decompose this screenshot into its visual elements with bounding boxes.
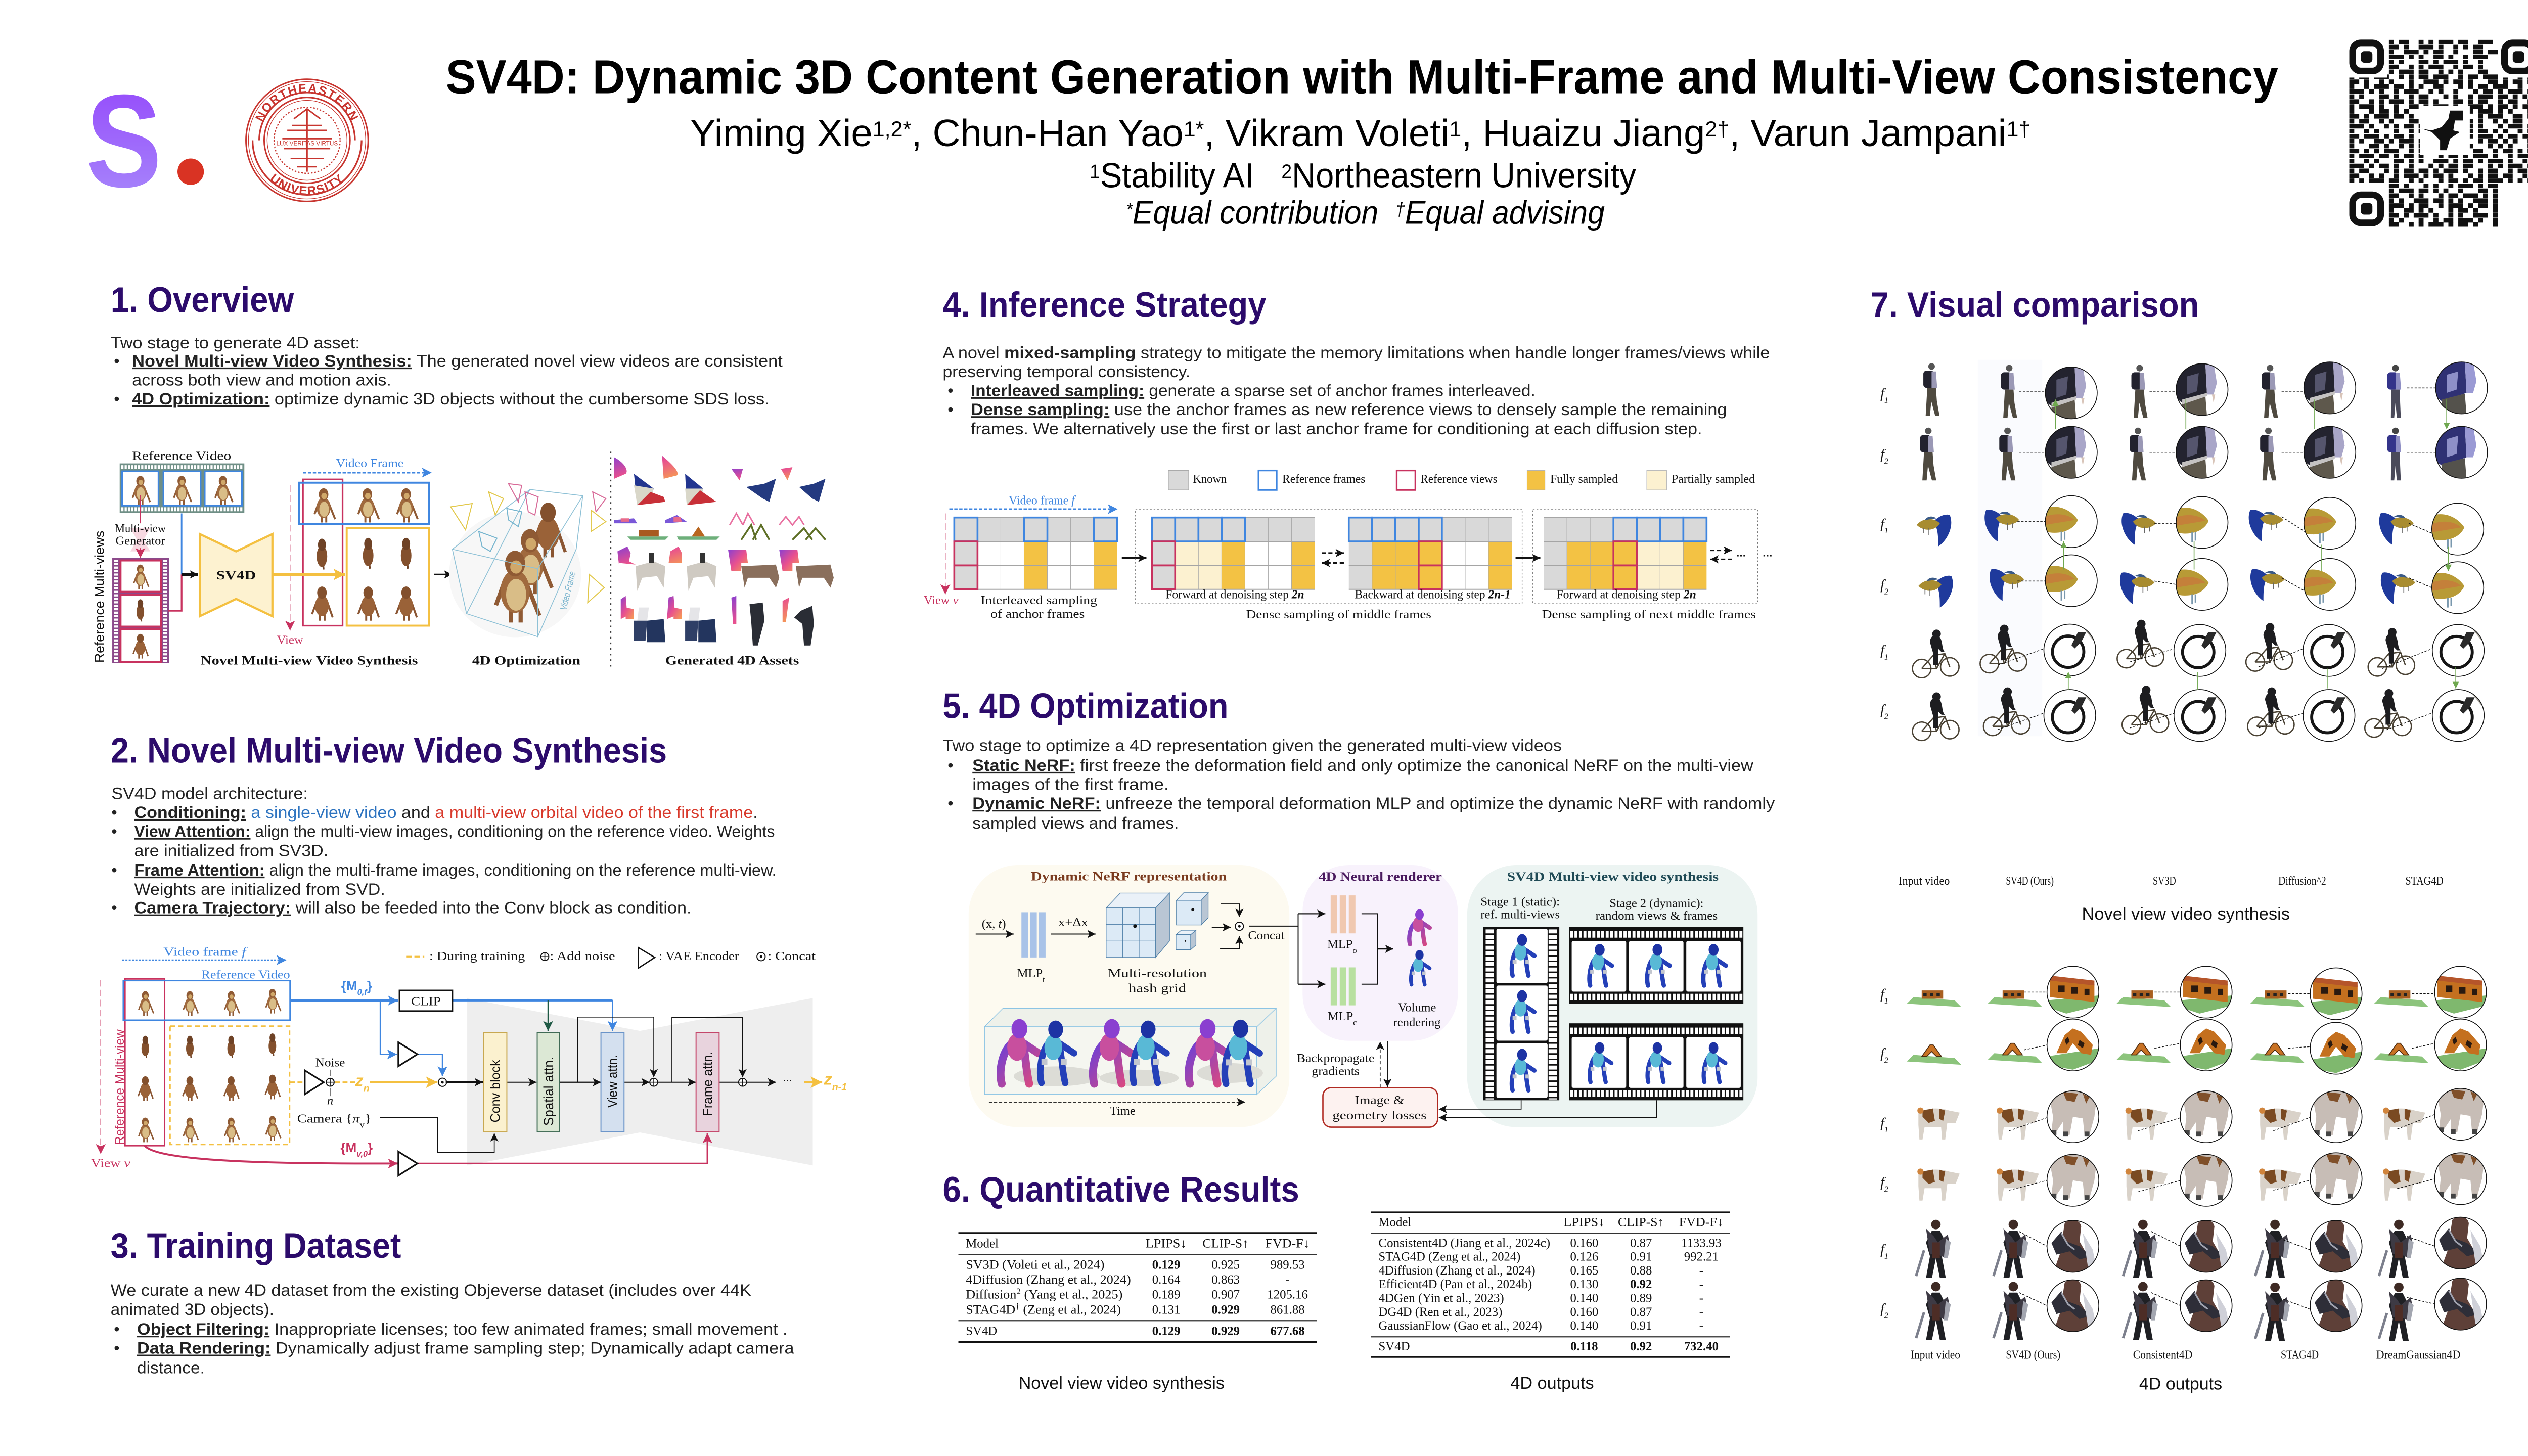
table: novel view video synthesis: 0.925 xyxy=(1211,1258,1240,1272)
table: novel view video synthesis: SV3D (Voleti et al., 2024) xyxy=(966,1258,1104,1272)
logo: Northeastern University seal: UNIVERSITY xyxy=(271,174,341,194)
row: fish: f1 xyxy=(1880,516,1888,535)
subpanel: dynamic NeRF representation: Dynamic NeRF representation xyxy=(1031,869,1227,883)
table: 4D outputs: 0.118 xyxy=(1570,1340,1598,1353)
loss box xyxy=(1323,1088,1437,1127)
table: novel view video synthesis: 0.907 xyxy=(1211,1288,1240,1301)
table: 4D outputs: LPIPS↓ xyxy=(1564,1215,1605,1229)
subpanel: 4D neural renderer xyxy=(1298,865,1458,1041)
figure captions: Generated 4D Assets xyxy=(665,653,799,667)
column captions: STAG4D xyxy=(2406,874,2444,888)
figure captions: Novel Multi-view Video Synthesis xyxy=(201,653,418,667)
grid: backward step xyxy=(1349,518,1512,589)
grid: forward step xyxy=(1152,518,1315,589)
subpanel: dynamic NeRF representation: MLPt xyxy=(1017,967,1045,984)
figure captions xyxy=(201,653,799,667)
table: 4D outputs: 0.91 xyxy=(1630,1319,1652,1333)
subpanel: dynamic NeRF representation xyxy=(969,865,1298,1127)
grid: next forward step xyxy=(1544,518,1706,589)
grid captions: Backward at denoising step 2n-1 xyxy=(1355,588,1511,602)
dataset text: • xyxy=(114,1339,120,1357)
table: 4D outputs: - xyxy=(1699,1264,1703,1278)
overview text: • xyxy=(114,352,120,370)
subpanel: 4D neural renderer: rendering xyxy=(1393,1016,1440,1029)
row: fish xyxy=(1880,496,2484,614)
optimization text: • xyxy=(947,794,954,812)
CLIP box: CLIP xyxy=(411,995,441,1009)
view axis: View v xyxy=(91,1157,130,1170)
time box with 4D figures xyxy=(984,1008,1276,1095)
table: 4D outputs: 0.87 xyxy=(1630,1305,1652,1319)
panel: 1. Overview xyxy=(92,280,834,668)
film strip: stage 2 bottom xyxy=(1569,1023,1743,1100)
grid captions: Forward at denoising step 2n xyxy=(1165,588,1304,602)
dashed group: next middle frames xyxy=(1533,509,1757,604)
table: novel view video synthesis: 989.53 xyxy=(1271,1258,1305,1272)
arrow to 4D optimization xyxy=(434,574,453,575)
overview text: • xyxy=(114,390,120,408)
subpanel: dynamic NeRF representation: Time xyxy=(1110,1104,1136,1118)
table: novel view video synthesis: 0.131 xyxy=(1152,1303,1181,1317)
architecture text: • xyxy=(111,899,117,917)
noise and latent path: Noise xyxy=(315,1056,345,1069)
CLIP box xyxy=(399,990,453,1011)
optimization text: • xyxy=(947,756,954,775)
panel: 6. Quantitative Results xyxy=(942,1169,1730,1393)
optimization text: images of the first frame. xyxy=(972,775,1169,793)
noise and latent path: n xyxy=(327,1094,333,1107)
main path: ... xyxy=(783,1071,792,1084)
column captions: DreamGaussian4D xyxy=(2376,1348,2460,1361)
block: Frame attention: Frame attn. xyxy=(700,1052,715,1116)
SV4D hourglass block xyxy=(200,534,273,616)
row: cow xyxy=(1880,1088,2487,1206)
table captions: Novel view video synthesis xyxy=(1019,1374,1225,1393)
table: 4D outputs: 4DGen (Yin et al., 2023) xyxy=(1379,1292,1504,1305)
row: warrior xyxy=(1880,1216,2487,1341)
table: novel view video synthesis: 0.929 xyxy=(1211,1303,1240,1317)
grid: interleaved anchors xyxy=(954,518,1117,589)
panel: 4. Inference Strategy xyxy=(924,285,1772,621)
legend: Known xyxy=(1193,472,1227,486)
block: Spatial attention xyxy=(537,1032,560,1132)
table: novel view video synthesis: SV4D xyxy=(966,1324,997,1338)
column captions: Diffusion^2 xyxy=(2278,874,2326,888)
subpanel: dynamic NeRF representation: Multi-resolution xyxy=(1108,967,1207,980)
conditioning lines xyxy=(145,978,743,1163)
grid captions: Dense sampling of next middle frames xyxy=(1542,608,1756,621)
table: 4D outputs: SV4D xyxy=(1379,1340,1410,1353)
table: 4D outputs: 0.160 xyxy=(1570,1236,1598,1250)
table: 4D outputs: 0.140 xyxy=(1570,1319,1598,1333)
row: fish: f2 xyxy=(1880,577,1888,596)
subpanel: 4D neural renderer: MLPσ xyxy=(1327,938,1357,955)
video frame axis xyxy=(122,945,290,982)
subpanel: SV4D multi-view video synthesis: random views & frames xyxy=(1596,909,1718,923)
table: 4D outputs: 0.130 xyxy=(1570,1278,1598,1291)
reference multi-view film strip: Reference Multi-views xyxy=(92,531,107,663)
architecture text: • xyxy=(111,803,117,822)
table: 4D outputs: Model xyxy=(1379,1215,1411,1229)
table: novel view video synthesis: 0.929 xyxy=(1211,1324,1240,1338)
subpanel: SV4D multi-view video synthesis: Stage 1 (static): xyxy=(1480,895,1560,908)
continuation arrows xyxy=(1710,545,1772,559)
dataset text: Object Filtering: Inappropriate licenses; too few animated frames; small movement . xyxy=(137,1320,788,1338)
table: novel view video synthesis: Diffusion 2 (Yang et al., 2025) xyxy=(966,1286,1122,1301)
inference text: • xyxy=(947,382,954,400)
title block xyxy=(446,50,2278,231)
conditioning lines: {Mv,0} xyxy=(340,1140,373,1159)
heading: 6. Quantitative Results xyxy=(942,1169,1299,1209)
noise and latent path: zn xyxy=(354,1071,370,1095)
table: novel view video synthesis: 677.68 xyxy=(1271,1324,1305,1338)
heading: 3. Training Dataset xyxy=(111,1225,401,1265)
backpropagation arrows xyxy=(1297,1041,1656,1118)
grid captions: of anchor frames xyxy=(990,607,1085,621)
table: 4D outputs: 0.91 xyxy=(1630,1250,1652,1264)
pipeline figure xyxy=(92,449,834,668)
architecture text xyxy=(111,784,777,917)
overview text xyxy=(111,334,783,408)
novel view comparison grid xyxy=(1880,360,2488,924)
table: novel view video synthesis: LPIPS↓ xyxy=(1146,1237,1187,1251)
table: novel view video synthesis: STAG4D † (Zeng et al., 2024) xyxy=(966,1301,1121,1317)
inference text: Interleaved sampling: generate a sparse set of anchor frames interleaved. xyxy=(971,382,1536,400)
row: cyclist xyxy=(1880,620,2484,741)
SV4D hourglass block: SV4D xyxy=(216,568,256,582)
table: 4D outputs: Consistent4D (Jiang et al., 2024c) xyxy=(1379,1236,1550,1250)
dataset text: Data Rendering: Dynamically adjust frame sampling step; Dynamically adapt camera xyxy=(137,1339,794,1357)
block: Spatial attention: Spatial attn. xyxy=(541,1057,556,1126)
table: 4D outputs: 0.126 xyxy=(1570,1250,1598,1264)
column captions xyxy=(1911,1348,2460,1361)
panel: 2. Novel Multi-view Video Synthesis xyxy=(91,731,847,1175)
architecture text: Weights are initialized from SVD. xyxy=(134,880,385,898)
table: 4D outputs: - xyxy=(1699,1305,1703,1319)
arrow xyxy=(1122,558,1146,559)
noise and latent path: Camera { π v} xyxy=(297,1112,372,1129)
film strip: stage 1 xyxy=(1483,927,1559,1100)
title: SV4D: Dynamic 3D Content Generation with Multi-Frame and Multi-View Consistency xyxy=(446,50,2278,104)
table: 4D outputs: 0.87 xyxy=(1630,1236,1652,1250)
noise and latent path xyxy=(290,1056,446,1129)
legend xyxy=(406,947,816,968)
authors: Yiming Xie 1,2*, Chun-Han Yao 1*, Vikram Voleti 1, Huaizu Jiang 2†, Varun Jampani 1† xyxy=(690,112,2030,154)
architecture text: are initialized from SV3D. xyxy=(134,841,328,859)
output frames grid: View xyxy=(277,633,303,647)
mixed-sampling figure xyxy=(924,471,1772,621)
architecture text: View Attention: align the multi-view images, conditioning on the reference video. Weights xyxy=(134,823,775,841)
main path xyxy=(446,1069,847,1093)
block: Conv block xyxy=(484,1032,507,1132)
video frame axis: Reference Video xyxy=(201,968,290,982)
loss box: Image & xyxy=(1355,1094,1404,1107)
logo: Northeastern University seal: NORTHEASTERN xyxy=(255,84,358,121)
main path: zn-1 xyxy=(823,1069,847,1093)
subpanel: dynamic NeRF representation: hash grid xyxy=(1128,981,1186,995)
column captions: SV3D xyxy=(2153,874,2176,888)
heading: 7. Visual comparison xyxy=(1871,285,2199,325)
table: novel view video synthesis: - xyxy=(1285,1273,1290,1287)
dataset text: distance. xyxy=(137,1359,205,1377)
affiliations: 1Stability AI 2Northeastern University xyxy=(1090,156,1637,195)
backpropagation arrows: Backpropagate xyxy=(1297,1052,1375,1065)
4D optimization cube: Video Frame xyxy=(558,570,578,611)
block: View attention: View attn. xyxy=(605,1055,620,1108)
table: 4D outputs: 0.88 xyxy=(1630,1264,1652,1278)
table: 4D outputs xyxy=(1371,1212,1730,1357)
table: 4D outputs: 992.21 xyxy=(1684,1250,1719,1264)
block: View attention xyxy=(601,1032,624,1132)
column captions: SV4D (Ours) xyxy=(2006,874,2054,888)
multi-view generator: Multi-view xyxy=(115,522,166,535)
loss box: geometry losses xyxy=(1332,1109,1427,1122)
architecture text: • xyxy=(111,861,117,879)
row: walking man: f2 xyxy=(1880,447,1888,466)
table: 4D outputs: 0.160 xyxy=(1570,1305,1598,1319)
optimization text: sampled views and frames. xyxy=(972,814,1179,832)
multi-view generator xyxy=(115,495,166,558)
legend: : During training xyxy=(429,949,525,963)
icon: multi-resolution hash grid xyxy=(1106,893,1208,958)
continuation arrows: ... xyxy=(1763,545,1772,559)
row: house xyxy=(1880,966,2487,1074)
grid captions: Interleaved sampling xyxy=(981,594,1097,607)
table: 4D outputs: 0.140 xyxy=(1570,1292,1598,1305)
column captions: Input video xyxy=(1899,874,1950,888)
frame grid xyxy=(123,979,290,1146)
table: 4D outputs: 0.92 xyxy=(1630,1278,1652,1291)
view axis xyxy=(91,980,130,1170)
block: Frame attention xyxy=(696,1032,719,1132)
heading: 4. Inference Strategy xyxy=(942,285,1266,325)
reference video film strip: Reference Video xyxy=(132,449,231,463)
table: 4D outputs: Efficient4D (Pan et al., 2024b) xyxy=(1379,1278,1532,1291)
row: house: f2 xyxy=(1880,1045,1888,1065)
arrow xyxy=(1516,558,1541,559)
optimization text: Dynamic NeRF: unfreeze the temporal deformation MLP and optimize the dynamic NeRF with randomly xyxy=(972,794,1775,812)
row: walking man: f1 xyxy=(1880,386,1888,404)
inference text: • xyxy=(947,400,954,419)
optimization text xyxy=(942,737,1775,832)
subpanel: dynamic NeRF representation: x+Δx xyxy=(1058,916,1088,929)
column captions: STAG4D xyxy=(2281,1348,2319,1361)
architecture text: Frame Attention: align the multi-frame images, conditioning on the reference multi-view. xyxy=(134,861,777,879)
optimization text: Static NeRF: first freeze the deformation field and only optimize the canonical NeRF on the multi-view xyxy=(972,756,1753,775)
table: 4D outputs: - xyxy=(1699,1278,1703,1291)
VAE encoders xyxy=(305,1042,417,1175)
row: house: f1 xyxy=(1880,986,1888,1005)
figure captions: 4D Optimization xyxy=(472,653,580,667)
dashed group: middle frames xyxy=(1136,509,1522,604)
panel: 3. Training Dataset xyxy=(111,1225,794,1377)
column captions: Input video xyxy=(1911,1348,1960,1361)
backpropagation arrows: gradients xyxy=(1312,1065,1360,1078)
optimization figure xyxy=(969,865,1757,1127)
overview text: Two stage to generate 4D asset: xyxy=(111,334,360,352)
table: novel view video synthesis: 0.189 xyxy=(1152,1288,1181,1301)
subpanel: dynamic NeRF representation: Concat xyxy=(1248,929,1285,942)
row: cow: f1 xyxy=(1880,1115,1888,1134)
table: 4D outputs: GaussianFlow (Gao et al., 2024) xyxy=(1379,1319,1542,1333)
subpanel: SV4D multi-view video synthesis: ref. multi-views xyxy=(1480,907,1560,921)
row: warrior: f2 xyxy=(1880,1301,1888,1320)
subpanel: dynamic NeRF representation: (x, t) xyxy=(982,917,1006,931)
subpanel: 4D neural renderer: Volume xyxy=(1398,1000,1436,1014)
table captions xyxy=(1019,1374,1594,1393)
table: novel view video synthesis: 0.129 xyxy=(1152,1324,1181,1338)
output frames grid: Video Frame xyxy=(336,457,403,470)
film strip: stage 2 top xyxy=(1569,927,1743,1004)
multi-view generator: Generator xyxy=(116,534,165,548)
overview text: Novel Multi-view Video Synthesis: The generated novel view videos are consistent xyxy=(132,352,783,370)
inference text: Dense sampling: use the anchor frames as new reference views to densely sample the remaining xyxy=(971,400,1727,419)
table: 4D outputs: 0.92 xyxy=(1630,1340,1652,1353)
overview text: 4D Optimization: optimize dynamic 3D objects without the cumbersome SDS loss. xyxy=(132,390,770,408)
table: 4D outputs: STAG4D (Zeng et al., 2024) xyxy=(1379,1250,1520,1264)
4D optimization cube xyxy=(449,484,606,637)
table: novel view video synthesis: 4Diffusion (Zhang et al., 2024) xyxy=(966,1273,1131,1287)
caption: 4D outputs xyxy=(2139,1374,2222,1393)
heading: 1. Overview xyxy=(111,280,294,320)
panel: 7. Visual comparison xyxy=(1871,285,2488,1393)
caption: Novel view video synthesis xyxy=(2082,904,2290,924)
block: Conv block: Conv block xyxy=(488,1060,503,1122)
heading: 5. 4D Optimization xyxy=(942,686,1228,725)
video frame axis: Video frame f xyxy=(163,945,248,959)
table: novel view video synthesis: 0.164 xyxy=(1152,1273,1181,1287)
table: novel view video synthesis: 861.88 xyxy=(1271,1303,1305,1317)
architecture text: Camera Trajectory: will also be feeded into the Conv block as condition. xyxy=(134,899,692,917)
column captions: Consistent4D xyxy=(2133,1348,2192,1361)
subpanel: 4D neural renderer: 4D Neural renderer xyxy=(1319,869,1442,884)
logo: Stability AI: S xyxy=(86,68,162,215)
legend: Fully sampled xyxy=(1550,472,1618,486)
reference multi-view film strip xyxy=(92,531,169,663)
inference text xyxy=(942,344,1770,438)
architecture text: Conditioning: a single-view video and a multi-view orbital video of the first frame . xyxy=(134,803,758,822)
legend: : VAE Encoder xyxy=(659,949,739,963)
equal contribution note: *Equal contribution †Equal advising xyxy=(1126,194,1605,231)
subpanel: SV4D multi-view video synthesis xyxy=(1467,865,1757,1127)
axes: Video frame f xyxy=(1009,494,1076,508)
legend: Reference frames xyxy=(1282,472,1365,486)
heading: 2. Novel Multi-view Video Synthesis xyxy=(111,731,667,770)
inference text: A novel mixed-sampling strategy to mitigate the memory limitations when handle longer frames/views while xyxy=(942,344,1770,362)
arrow into SV4D xyxy=(182,574,198,575)
dataset text: animated 3D objects). xyxy=(111,1300,274,1318)
legend: : Concat xyxy=(768,949,816,963)
architecture text: • xyxy=(111,823,117,841)
table: 4D outputs: 0.89 xyxy=(1630,1292,1652,1305)
row: warrior: f1 xyxy=(1880,1242,1888,1260)
table: novel view video synthesis: CLIP-S↑ xyxy=(1202,1237,1249,1251)
table: novel view video synthesis: 0.129 xyxy=(1152,1258,1181,1272)
grid captions xyxy=(981,588,1756,621)
dataset text: • xyxy=(114,1320,120,1338)
U-Net bowtie background xyxy=(467,998,813,1165)
table: novel view video synthesis: 0.863 xyxy=(1211,1273,1240,1287)
table: 4D outputs: 732.40 xyxy=(1684,1340,1719,1353)
optimization text: Two stage to optimize a 4D representation given the generated multi-view videos xyxy=(942,737,1562,755)
table: 4D outputs: 0.165 xyxy=(1570,1264,1598,1278)
panel: 5. 4D Optimization xyxy=(942,686,1775,1127)
table: 4D outputs: - xyxy=(1699,1319,1703,1333)
table captions: 4D outputs xyxy=(1510,1374,1594,1393)
grid captions: Dense sampling of middle frames xyxy=(1246,608,1431,621)
dataset text: We curate a new 4D dataset from the existing Objeverse dataset (includes over 44K xyxy=(111,1281,751,1299)
generated 4D assets xyxy=(614,456,834,646)
legend: Partially sampled xyxy=(1672,472,1755,486)
conditioning lines: {M0,f} xyxy=(341,978,372,997)
row: cow: f2 xyxy=(1880,1175,1888,1194)
logo: Northeastern University seal: LUX VERITAS VIRTUS xyxy=(277,140,338,147)
legend xyxy=(1168,471,1755,490)
table: 4D outputs: 4Diffusion (Zhang et al., 2024) xyxy=(1379,1264,1536,1278)
table: 4D outputs: FVD-F↓ xyxy=(1679,1215,1724,1229)
subpanel: SV4D multi-view video synthesis: Stage 2 (dynamic): xyxy=(1609,897,1703,911)
dotted divider xyxy=(610,451,611,668)
subpanel: SV4D multi-view video synthesis: SV4D Multi-view video synthesis xyxy=(1507,869,1719,884)
table: 4D outputs: DG4D (Ren et al., 2023) xyxy=(1379,1305,1502,1319)
subpanel: 4D neural renderer: MLPc xyxy=(1328,1010,1357,1027)
model architecture diagram xyxy=(91,945,847,1175)
axes xyxy=(924,494,1118,607)
table: novel view video synthesis xyxy=(959,1233,1317,1342)
legend: Reference views xyxy=(1420,472,1498,486)
inference text: preserving temporal consistency. xyxy=(942,362,1190,381)
dataset text xyxy=(111,1281,794,1377)
view axis: Reference Multi-view xyxy=(113,1029,127,1145)
logo: Northeastern University seal xyxy=(246,79,368,201)
table: 4D outputs: CLIP-S↑ xyxy=(1618,1215,1664,1229)
table: 4D outputs: - xyxy=(1699,1292,1703,1305)
axes: View v xyxy=(924,594,959,607)
column captions xyxy=(1899,874,2444,888)
architecture text: SV4D model architecture: xyxy=(111,784,308,802)
inference text: frames. We alternatively use the first or last anchor frame for conditioning at each diffusion step. xyxy=(971,420,1702,438)
overview text: across both view and motion axis. xyxy=(132,371,391,389)
table: novel view video synthesis: 1205.16 xyxy=(1267,1288,1308,1301)
row: cyclist: f2 xyxy=(1880,702,1888,721)
reference video film strip xyxy=(120,449,244,513)
table: 4D outputs: 1133.93 xyxy=(1681,1236,1722,1250)
row: cyclist: f1 xyxy=(1880,643,1888,662)
grid captions: Forward at denoising step 2n xyxy=(1557,588,1696,602)
table: novel view video synthesis: Model xyxy=(966,1237,999,1251)
continuation arrows: ... xyxy=(1736,545,1746,559)
row: walking man xyxy=(1880,361,2488,480)
blue and red input lines xyxy=(181,514,182,574)
legend: : Add noise xyxy=(550,949,615,963)
forward and backward arrows xyxy=(1322,553,1344,563)
QR code xyxy=(2346,36,2528,230)
output frames grid xyxy=(273,457,432,647)
table: novel view video synthesis: FVD-F↓ xyxy=(1266,1237,1310,1251)
column captions: SV4D (Ours) xyxy=(2006,1348,2060,1361)
4D output comparison grid xyxy=(1880,966,2487,1393)
